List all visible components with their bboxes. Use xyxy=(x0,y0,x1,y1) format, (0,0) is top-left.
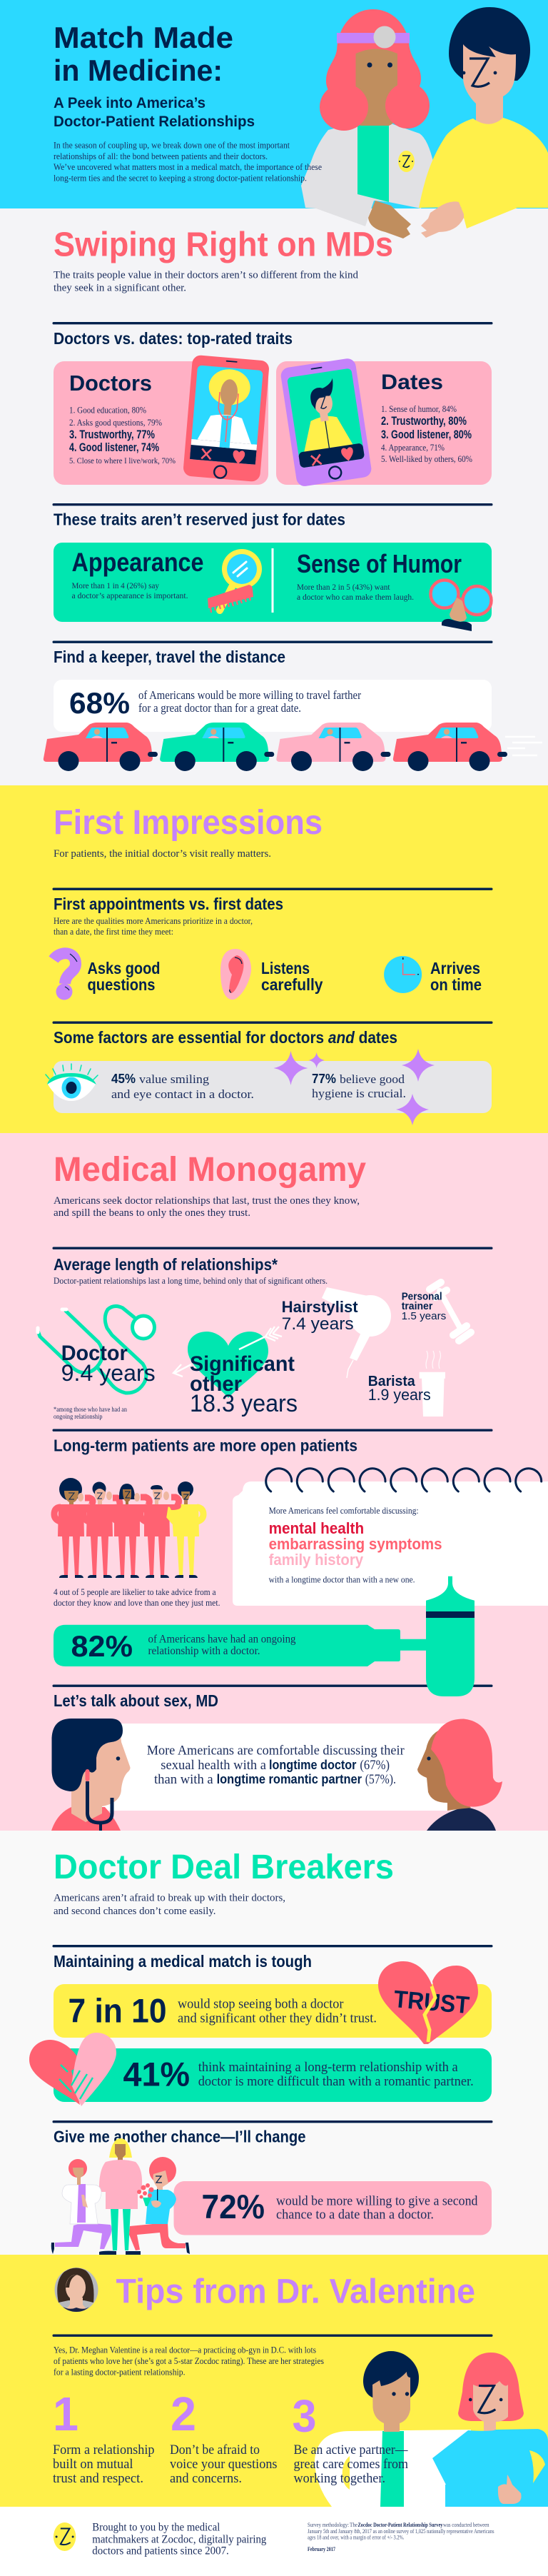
icon: eye xyxy=(46,1064,98,1101)
subheading: another chance: Give me another chance—I’ll change xyxy=(54,2128,305,2146)
survey methodology: February 2017 xyxy=(308,2546,335,2552)
stat: personal trainer length: 1.5 years xyxy=(402,1310,446,1322)
doctors trait list: 5. Close to where I live/work, 70% xyxy=(69,456,176,466)
panel: sexual health xyxy=(100,1724,457,1811)
section intro: deal breakers: Americans aren’t afraid to break up with their doctors, xyxy=(54,1892,285,1903)
panel: doctors traits xyxy=(54,361,268,485)
panel: notepad xyxy=(233,1469,548,1606)
tip 3: great care comes from xyxy=(294,2457,408,2472)
label: arrives on time: on time xyxy=(430,975,482,994)
subheading: maintaining a match: Maintaining a medical match is tough xyxy=(54,1952,312,1971)
heading: Tips from Dr. Valentine: Tips from Dr. Valentine xyxy=(116,2273,475,2310)
dates trait list xyxy=(381,404,472,464)
subheading: find a keeper: Find a keeper, travel the distance xyxy=(54,648,285,666)
heading: Doctor Deal Breakers: Doctor Deal Breakers xyxy=(54,1848,394,1886)
stat: 41%: 41% xyxy=(123,2055,190,2093)
footer text xyxy=(92,2522,266,2557)
label: listens carefully: Listens xyxy=(261,959,310,977)
dates trait list: 1. Sense of humor, 84% xyxy=(381,404,457,414)
illustration: doctor and patient shaking hands xyxy=(301,7,548,238)
panel: reflex hammer stat xyxy=(54,1576,475,1696)
section intro: monogamy: and spill the beans to only the ones they trust. xyxy=(54,1207,250,1219)
illustration: doctor and patient thumbs up xyxy=(315,2351,548,2507)
stat: hygiene: 77% xyxy=(312,1071,336,1086)
stat: significant other length: Significant xyxy=(190,1352,295,1376)
sexual health text: sexual health with a xyxy=(161,1758,267,1773)
label: listens carefully xyxy=(261,959,323,994)
stat: 68%: 68% xyxy=(69,686,130,720)
stat: 72%: 72% xyxy=(201,2188,265,2225)
sexual health text: (67%) xyxy=(360,1758,390,1773)
tips intro text: of patients who love her (she’s got a 5-star Zocdoc rating). These are her strategies xyxy=(54,2356,324,2366)
stat text: of Americans have had an ongoing xyxy=(148,1634,295,1645)
footnote: *among those who have had an xyxy=(54,1407,127,1414)
illustration: row of people whispering xyxy=(54,1478,203,1578)
section intro: swiping xyxy=(54,270,358,294)
stat text: relationship with a doctor. xyxy=(148,1645,260,1657)
heading: First Impressions: First Impressions xyxy=(54,804,323,842)
illustration: doctor profile xyxy=(51,1719,130,1831)
stat: doctor length: Doctor xyxy=(61,1342,128,1365)
tip 3 xyxy=(293,2390,408,2486)
icon: sparkles xyxy=(274,1049,435,1125)
stat: eye contact: value smiling xyxy=(139,1072,210,1086)
tip 1: Form a relationship xyxy=(53,2442,154,2457)
subheading: some factors: Some factors are essential for doctors and dates xyxy=(54,1028,397,1047)
icon: hands heart xyxy=(29,2033,116,2106)
first appointments text: Here are the qualities more Americans prioritize in a doctor, xyxy=(54,916,253,926)
sexual health text: longtime doctor xyxy=(269,1757,357,1772)
stat text: for a great doctor than for a great date. xyxy=(138,701,301,715)
tip 1 xyxy=(53,2388,154,2486)
dates trait list: 4. Appearance, 71% xyxy=(381,443,445,453)
icon: heart with arrow xyxy=(173,1327,282,1398)
stat text: doctor is more difficult than with a romantic partner. xyxy=(198,2074,474,2089)
stat text: would be more willing to give a second xyxy=(276,2193,478,2209)
header title xyxy=(54,21,233,87)
header subtitle: A Peek into America’s xyxy=(54,95,206,111)
tip 2 xyxy=(170,2388,277,2486)
dates trait list: 5. Well-liked by others, 60% xyxy=(381,454,472,464)
sexual health text: longtime romantic partner xyxy=(217,1771,362,1786)
sexual health text: than with a xyxy=(154,1772,213,1787)
panel: eye contact and hygiene xyxy=(54,1061,492,1113)
stat text xyxy=(138,688,361,715)
stat: 82%: 82% xyxy=(71,1629,133,1663)
sense of humor text xyxy=(297,582,414,602)
notepad intro text: More Americans feel comfortable discussing: xyxy=(269,1506,419,1516)
icon: hair dryer xyxy=(322,1287,391,1378)
dates trait list: 2. Trustworthy, 80% xyxy=(381,415,467,428)
stat text: and significant other they didn’t trust. xyxy=(178,2011,377,2026)
survey methodology: Zocdoc Doctor-Patient Relationship Survey xyxy=(358,2522,442,2528)
icon: broken heart with trust xyxy=(378,1961,478,2044)
sexual health text: More Americans are comfortable discussing their xyxy=(147,1744,405,1758)
heading: Medical Monogamy: Medical Monogamy xyxy=(54,1151,366,1189)
stat: hairstylist length: Hairstylist xyxy=(282,1298,358,1316)
doctors trait list: 2. Asks good questions, 79% xyxy=(69,418,162,428)
stat: significant other length: other xyxy=(190,1372,242,1396)
footnote xyxy=(54,1407,127,1421)
header intro text: In the season of coupling up, we break down one of the most important xyxy=(54,140,290,150)
subheading: first appointments: First appointments vs. first dates xyxy=(54,895,283,913)
header title: in Medicine: xyxy=(54,54,223,87)
sexual health text xyxy=(147,1744,405,1787)
stat: hygiene xyxy=(312,1071,406,1100)
icon: question mark xyxy=(54,953,77,1000)
tip 2: and concerns. xyxy=(170,2471,242,2486)
icon: novelty glasses xyxy=(431,580,491,631)
subheading: long-term patients: Long-term patients are more open patients xyxy=(54,1437,357,1455)
icon: ear xyxy=(220,949,251,1000)
section intro: swiping: they seek in a significant other. xyxy=(54,283,186,294)
tip 3: 3 xyxy=(293,2390,317,2442)
dates heading: Dates xyxy=(381,371,443,394)
subheading: doctors vs dates: Doctors vs. dates: top-rated traits xyxy=(54,329,293,348)
sexual health text: (57%). xyxy=(365,1772,396,1787)
icon: green car xyxy=(160,723,274,771)
tip 1: trust and respect. xyxy=(53,2471,143,2486)
icon: dumbbell xyxy=(430,1282,471,1341)
stat: doctor length: 9.4 years xyxy=(61,1360,156,1386)
appearance text xyxy=(71,580,188,600)
label: listens carefully: carefully xyxy=(261,975,323,994)
dates trait list: 3. Good listener, 80% xyxy=(381,428,472,441)
icon: date profile phone xyxy=(280,358,372,488)
panel: travel stat xyxy=(54,680,492,732)
label: asks good questions: questions xyxy=(87,975,156,994)
footer text: doctors and patients since 2007. xyxy=(92,2545,229,2557)
notepad topics: mental health xyxy=(269,1519,364,1537)
header intro text: relationships of all: the bond between patients and their doctors. xyxy=(54,151,268,161)
appearance text: More than 1 in 4 (26%) say xyxy=(71,580,159,590)
stat: significant other length xyxy=(190,1352,298,1417)
header title: Match Made xyxy=(54,21,233,54)
survey methodology: ages 18 and over, with a margin of error of +/- 3.2%. xyxy=(308,2535,404,2540)
icon: broken heart with trust: TRUST xyxy=(392,1986,470,2019)
stat: hygiene: believe good xyxy=(340,1072,405,1086)
stat: eye contact: and eye contact in a doctor. xyxy=(111,1087,254,1101)
notepad topics: embarrassing symptoms xyxy=(269,1535,442,1553)
survey methodology: was conducted between xyxy=(443,2522,489,2528)
icon: stethoscope xyxy=(38,1306,154,1393)
stat: barista length xyxy=(368,1374,431,1404)
tip 3: working together. xyxy=(294,2471,385,2486)
label: asks good questions xyxy=(87,959,160,994)
section intro: first impressions: For patients, the initial doctor’s visit really matters. xyxy=(54,848,271,860)
stat: hairstylist length xyxy=(282,1298,358,1334)
tip 1: built on mutual xyxy=(53,2457,133,2472)
notepad topics: family history xyxy=(269,1551,364,1569)
tip 3: Be an active partner— xyxy=(294,2442,408,2457)
illustration: kneeling doctor and patient around date xyxy=(51,2138,190,2255)
stat text xyxy=(178,1996,377,2026)
survey methodology xyxy=(308,2522,494,2552)
stat: eye contact: 45% xyxy=(111,1071,136,1086)
stat: personal trainer length: Personal xyxy=(402,1291,442,1302)
stat: barista length: Barista xyxy=(368,1374,416,1389)
doctors trait list: 3. Trustworthy, 77% xyxy=(69,428,155,441)
section intro: deal breakers xyxy=(54,1892,285,1917)
header intro text continued xyxy=(54,162,322,183)
survey methodology: The xyxy=(350,2522,357,2528)
portrait of Dr. Valentine xyxy=(54,2268,98,2312)
people caption: 4 out of 5 people are likelier to take advice from a xyxy=(54,1587,216,1597)
icon: coffee cup xyxy=(420,1351,445,1417)
sense of humor text: More than 2 in 5 (43%) want xyxy=(297,582,390,592)
tips intro text xyxy=(54,2345,324,2378)
doctors heading: Doctors xyxy=(69,371,152,396)
section intro: monogamy: Americans seek doctor relationships that last, trust the ones they know, xyxy=(54,1195,360,1207)
stat: barista length: 1.9 years xyxy=(368,1386,431,1404)
stat: significant other length: 18.3 years xyxy=(190,1390,298,1417)
doctors trait list: 1. Good education, 80% xyxy=(69,406,146,416)
doctors trait list xyxy=(69,406,176,466)
stat text: chance to a date than a doctor. xyxy=(276,2208,434,2222)
tips intro text: for a lasting doctor-patient relationship. xyxy=(54,2368,186,2378)
section intro: swiping: The traits people value in their doctors aren’t so different from the kind xyxy=(54,270,358,281)
footnote: ongoing relationship xyxy=(54,1414,103,1421)
stat: personal trainer length: trainer xyxy=(402,1300,432,1312)
subheading: let's talk about sex: Let’s talk about sex, MD xyxy=(54,1691,218,1710)
header subtitle: Doctor-Patient Relationships xyxy=(54,114,255,130)
subheading: average length: Average length of relationships* xyxy=(54,1255,278,1274)
notepad topics xyxy=(269,1519,442,1569)
appearance text: a doctor’s appearance is important. xyxy=(71,590,188,600)
icon: mirror and comb xyxy=(208,549,262,613)
label: arrives on time: Arrives xyxy=(430,959,480,977)
stat: eye contact xyxy=(111,1071,254,1101)
panel: 72% xyxy=(174,2181,492,2235)
people caption: doctor they know and love than one they just met. xyxy=(54,1598,220,1608)
stat text xyxy=(148,1634,295,1657)
header intro text continued: We’ve uncovered what matters most in a medical match, the importance of these xyxy=(54,162,322,172)
tips intro text: Yes, Dr. Meghan Valentine is a real doctor—a practicing ob-gyn in D.C. with lots xyxy=(54,2345,316,2355)
sense of humor heading: Sense of Humor xyxy=(297,549,462,578)
sense of humor text: a doctor who can make them laugh. xyxy=(297,592,414,602)
stat text: think maintaining a long-term relationship with a xyxy=(198,2060,458,2075)
icon: Zocdoc logo xyxy=(54,2522,76,2551)
tip 1: 1 xyxy=(53,2388,78,2441)
average length text: Doctor-patient relationships last a long time, behind only that of significant others. xyxy=(54,1276,328,1286)
panel: 41% xyxy=(54,2048,492,2102)
notepad closing text: with a longtime doctor than with a new one. xyxy=(269,1575,415,1585)
panel: dates traits xyxy=(276,361,492,485)
stat text: would stop seeing both a doctor xyxy=(178,1996,344,2012)
footer text: matchmakers at Zocdoc, digitally pairing xyxy=(92,2533,266,2546)
tip 2: Don’t be afraid to xyxy=(170,2442,260,2457)
icon: coral car with speed lines xyxy=(393,723,542,771)
stat: personal trainer length xyxy=(402,1291,446,1322)
section intro: deal breakers: and second chances don’t come easily. xyxy=(54,1906,215,1917)
survey methodology: January 5th and January 8th, 2017 as an online survey of 1,025 nationally representative Americans xyxy=(308,2528,494,2535)
label: arrives on time xyxy=(430,959,482,994)
icon: coral car xyxy=(44,723,158,771)
people caption xyxy=(54,1587,220,1608)
doctors trait list: 4. Good listener, 74% xyxy=(69,441,159,454)
header subtitle xyxy=(54,95,255,130)
icon: doctor profile phone xyxy=(183,355,270,482)
stat: 7 in 10: 7 in 10 xyxy=(68,1992,167,2029)
header intro text xyxy=(54,140,290,161)
stat text: of Americans would be more willing to travel farther xyxy=(138,688,361,702)
survey methodology: Survey methodology: xyxy=(308,2522,349,2528)
tip 2: 2 xyxy=(171,2388,196,2441)
header intro text continued: long-term ties and the secret to keeping a strong doctor-patient relationship. xyxy=(54,173,307,183)
stat: hygiene: hygiene is crucial. xyxy=(312,1087,406,1100)
section intro: monogamy xyxy=(54,1195,360,1219)
stat text xyxy=(276,2193,478,2222)
stat text xyxy=(198,2060,474,2089)
appearance heading: Appearance xyxy=(71,548,204,577)
stat: doctor length xyxy=(61,1342,156,1386)
first appointments text xyxy=(54,916,253,937)
panel: appearance and humor xyxy=(54,543,492,622)
footer text: Brought to you by the medical xyxy=(92,2522,220,2533)
first appointments text: than a date, the first time they meet: xyxy=(54,927,173,937)
tip 2: voice your questions xyxy=(170,2457,277,2472)
heading: Swiping Right on MDs: Swiping Right on MDs xyxy=(54,226,393,264)
icon: pink car xyxy=(276,723,391,771)
icon: clock xyxy=(384,956,422,993)
notepad rings xyxy=(266,1469,542,1491)
subheading: these traits: These traits aren’t reserved just for dates xyxy=(54,510,345,528)
stat: hairstylist length: 7.4 years xyxy=(282,1314,354,1334)
label: asks good questions: Asks good xyxy=(87,959,160,977)
illustration: patient profile xyxy=(417,1719,502,1831)
panel: 7 in 10 xyxy=(54,1984,492,2038)
